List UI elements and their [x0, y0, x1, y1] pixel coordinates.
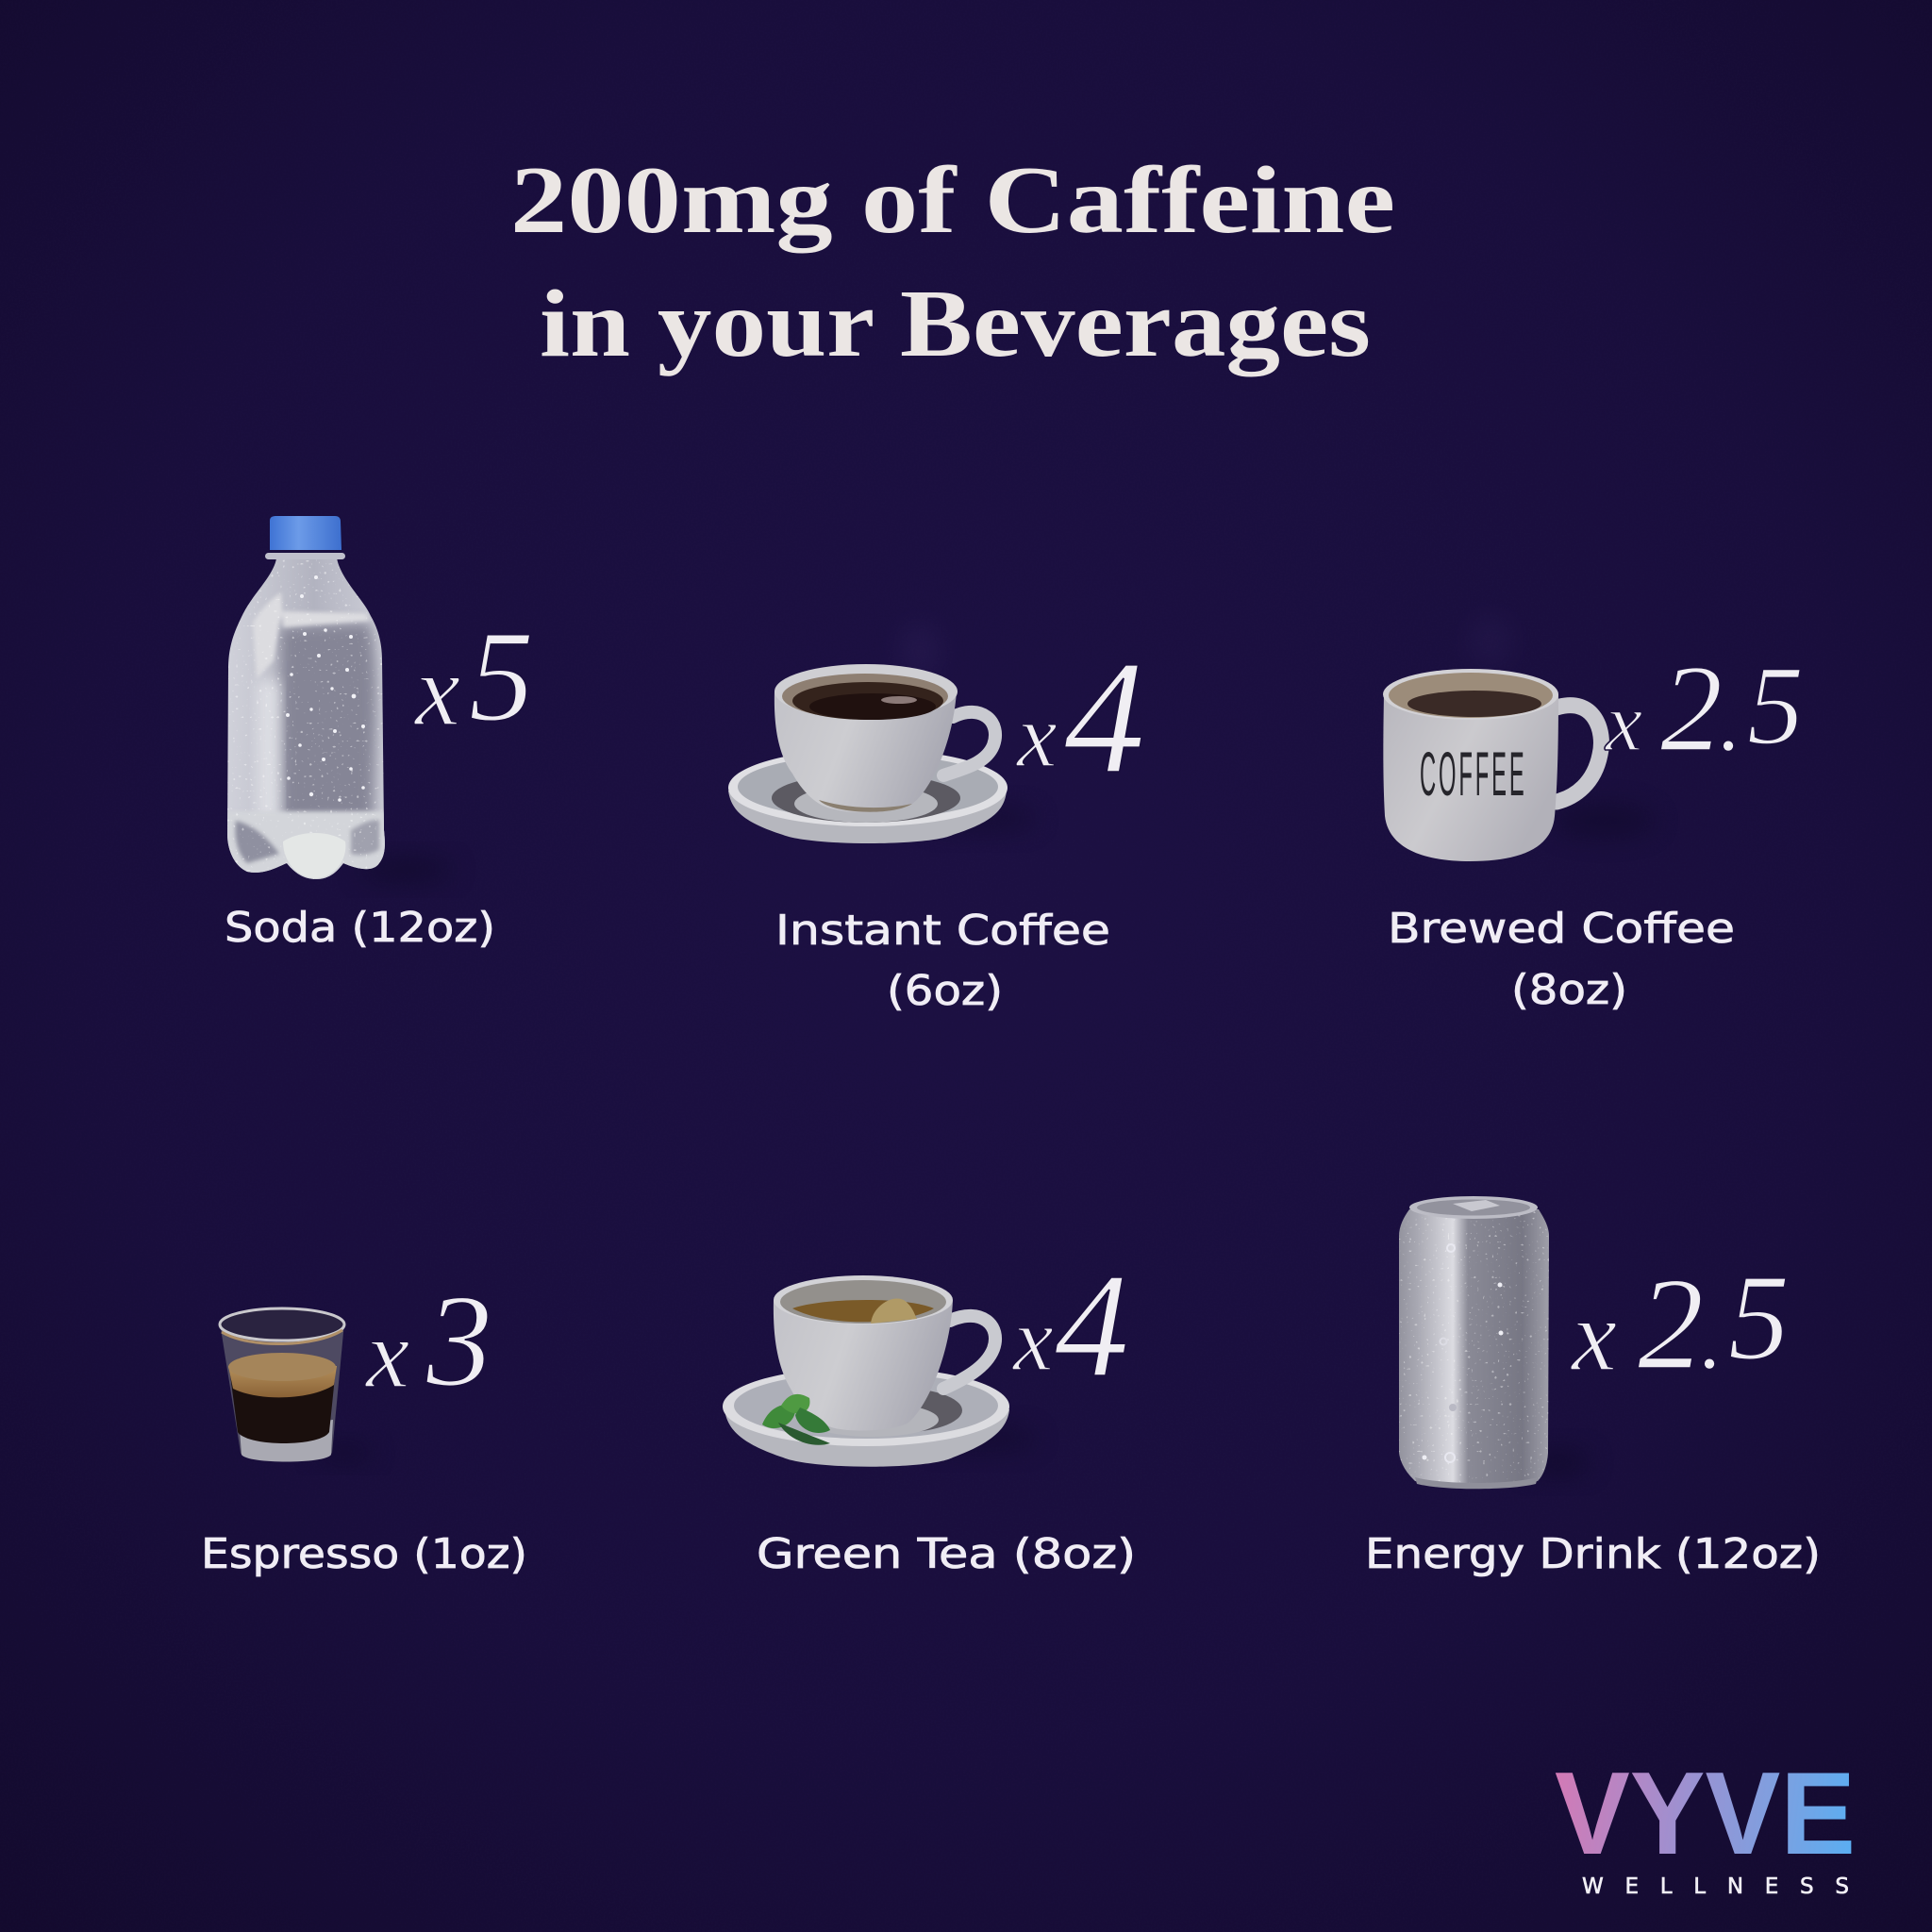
panel: energy drink [1365, 1196, 1821, 1578]
multiplier: x2.5: x [1604, 677, 1642, 769]
label: brewed coffee: Brewed Coffee [1388, 905, 1735, 953]
multiplier: x2.5: . [1700, 1284, 1724, 1389]
icon: espresso glass [220, 1308, 373, 1462]
panel: espresso [201, 1268, 527, 1578]
label: instant coffee: (6oz) [887, 967, 1003, 1015]
panel: brewed coffee [1383, 615, 1804, 1014]
panel: soda [225, 516, 534, 952]
label: brewed coffee [1388, 905, 1735, 1014]
title [510, 147, 1395, 377]
logo: VYVE Wellness: VYVE [1555, 1749, 1856, 1879]
label: green tea: Green Tea (8oz) [757, 1530, 1136, 1578]
title: 200mg of Caffeine [510, 147, 1395, 254]
multiplier: x3: 3 [425, 1268, 492, 1414]
icon: aluminium can [1399, 1196, 1590, 1489]
icon: coffee cup and saucer [728, 623, 1038, 843]
multiplier: x2.5: 2 [1638, 1251, 1704, 1397]
multiplier: x2.5: x [1570, 1280, 1617, 1392]
icon: tea cup and saucer [723, 1275, 1038, 1467]
multiplier: x4: x [1015, 685, 1058, 786]
multiplier: x3: x [364, 1300, 409, 1408]
label: instant coffee [775, 907, 1110, 1015]
panel: green tea [723, 1243, 1136, 1578]
label: brewed coffee: (8oz) [1511, 966, 1627, 1014]
icon: soda bottle [227, 516, 453, 882]
icon: mint leaves [762, 1394, 830, 1445]
multiplier: x2.5: . [1719, 666, 1742, 771]
label: espresso: Espresso (1oz) [201, 1530, 527, 1578]
multiplier: x2.5: 2 [1660, 639, 1723, 777]
logo: VYVE Wellness: WELLNESS [1582, 1874, 1849, 1899]
multiplier: x4: x [1011, 1289, 1054, 1390]
label: instant coffee: Instant Coffee [775, 907, 1110, 955]
label: soda: Soda (12oz) [225, 904, 495, 952]
title: in your Beverages [540, 271, 1371, 377]
multiplier: x4: 4 [1055, 1243, 1129, 1408]
multiplier: x2.5: 5 [1747, 642, 1804, 768]
panel: instant coffee [728, 623, 1145, 1015]
multiplier: x2.5: 5 [1728, 1250, 1790, 1386]
multiplier: x5: 5 [469, 604, 534, 748]
multiplier: x4: 4 [1064, 628, 1145, 808]
icon: coffee mug [1383, 615, 1656, 861]
label: energy drink: Energy Drink (12oz) [1365, 1530, 1821, 1578]
multiplier: x5: x [413, 635, 460, 747]
mug wording: COFFEE [1420, 739, 1527, 809]
